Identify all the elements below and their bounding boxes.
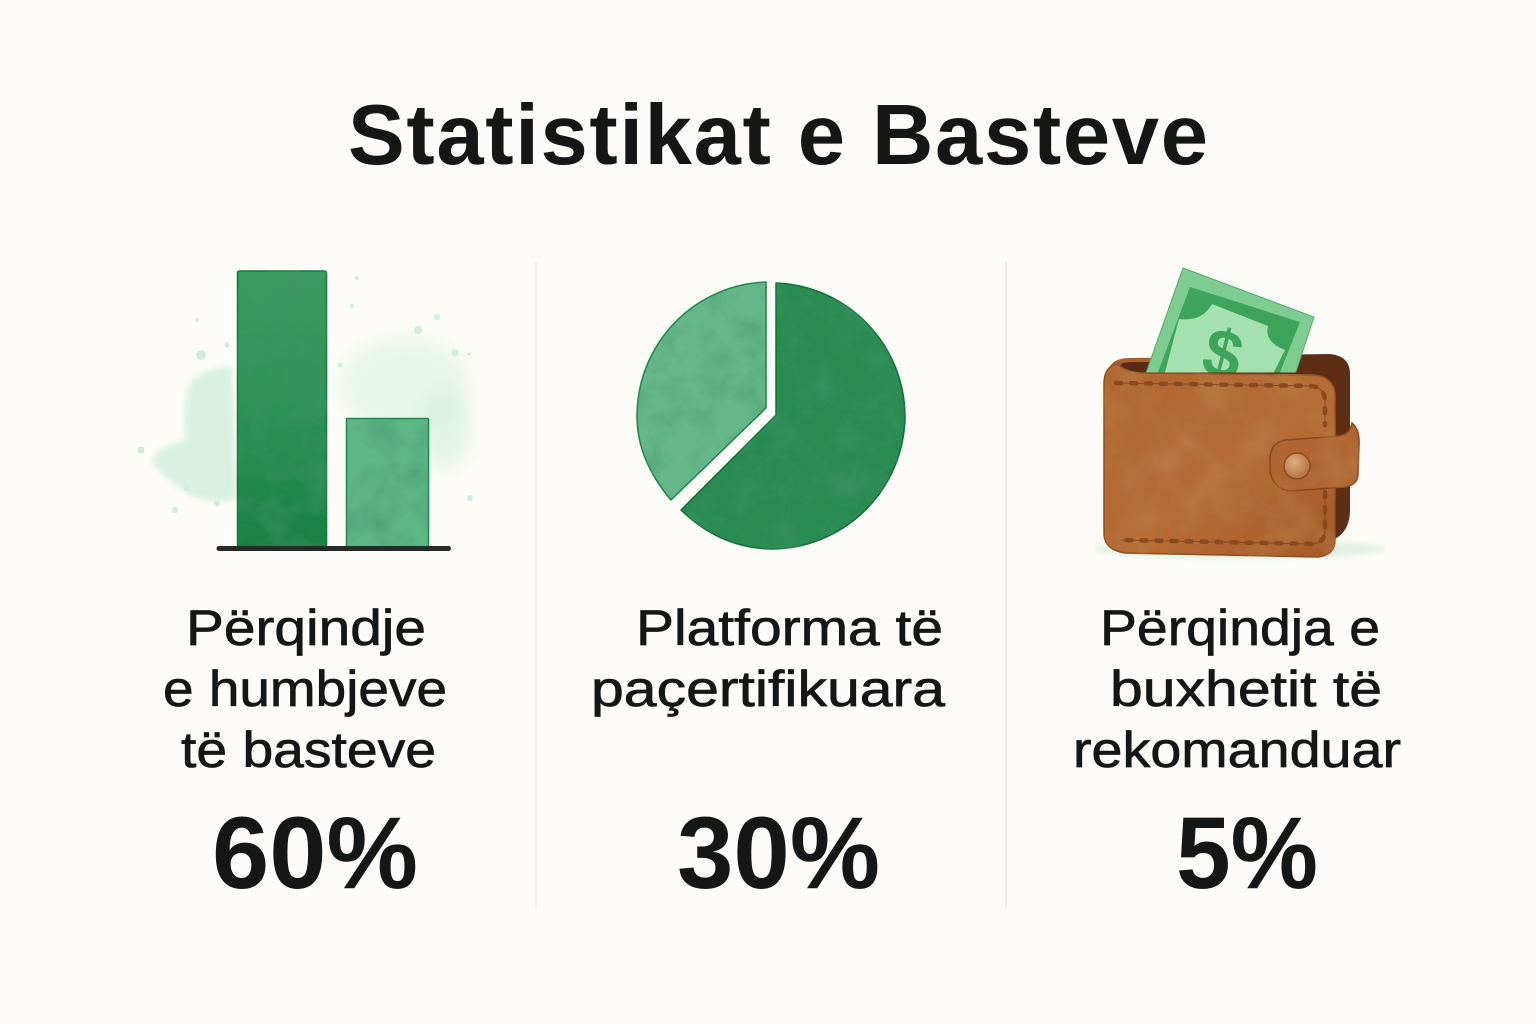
large slice — [681, 283, 905, 549]
label: losses: Përqindje — [186, 600, 426, 656]
baseline — [216, 546, 451, 551]
stitching — [1116, 383, 1325, 544]
dollar sign: $ — [1195, 313, 1250, 396]
label: platforms: paçertifikuara — [591, 661, 945, 717]
clasp strap — [1270, 423, 1359, 491]
panel: uncertified platforms — [591, 282, 945, 910]
label: budget: rekomanduar — [1073, 722, 1401, 778]
short bar — [346, 418, 428, 548]
value: 30%: 30% — [677, 796, 880, 910]
small slice — [637, 282, 766, 500]
wallet front — [1104, 364, 1335, 557]
label: platforms: Platforma të — [636, 600, 943, 656]
value: 60%: 60% — [212, 796, 418, 910]
icon: watercolor bar chart — [138, 271, 473, 551]
icon: pie chart — [637, 282, 905, 549]
value: 5%: 5% — [1176, 796, 1318, 910]
wallet back — [1108, 357, 1200, 420]
banknote — [1146, 267, 1315, 372]
label: budget — [1073, 600, 1401, 778]
label: losses: të basteve — [181, 722, 436, 778]
label: losses: e humbjeve — [163, 661, 447, 717]
label: losses — [163, 600, 447, 778]
icon: wallet with banknote — [1095, 268, 1385, 559]
panel: losses percentage — [138, 271, 473, 910]
label: platforms — [591, 600, 945, 717]
label: budget: buxhetit të — [1110, 661, 1382, 717]
label: budget: Përqindja e — [1100, 600, 1380, 656]
title: Statistikat e Basteve — [348, 88, 1208, 183]
clasp button — [1284, 453, 1310, 479]
panel: recommended budget — [1073, 268, 1401, 910]
tall bar — [238, 271, 326, 547]
